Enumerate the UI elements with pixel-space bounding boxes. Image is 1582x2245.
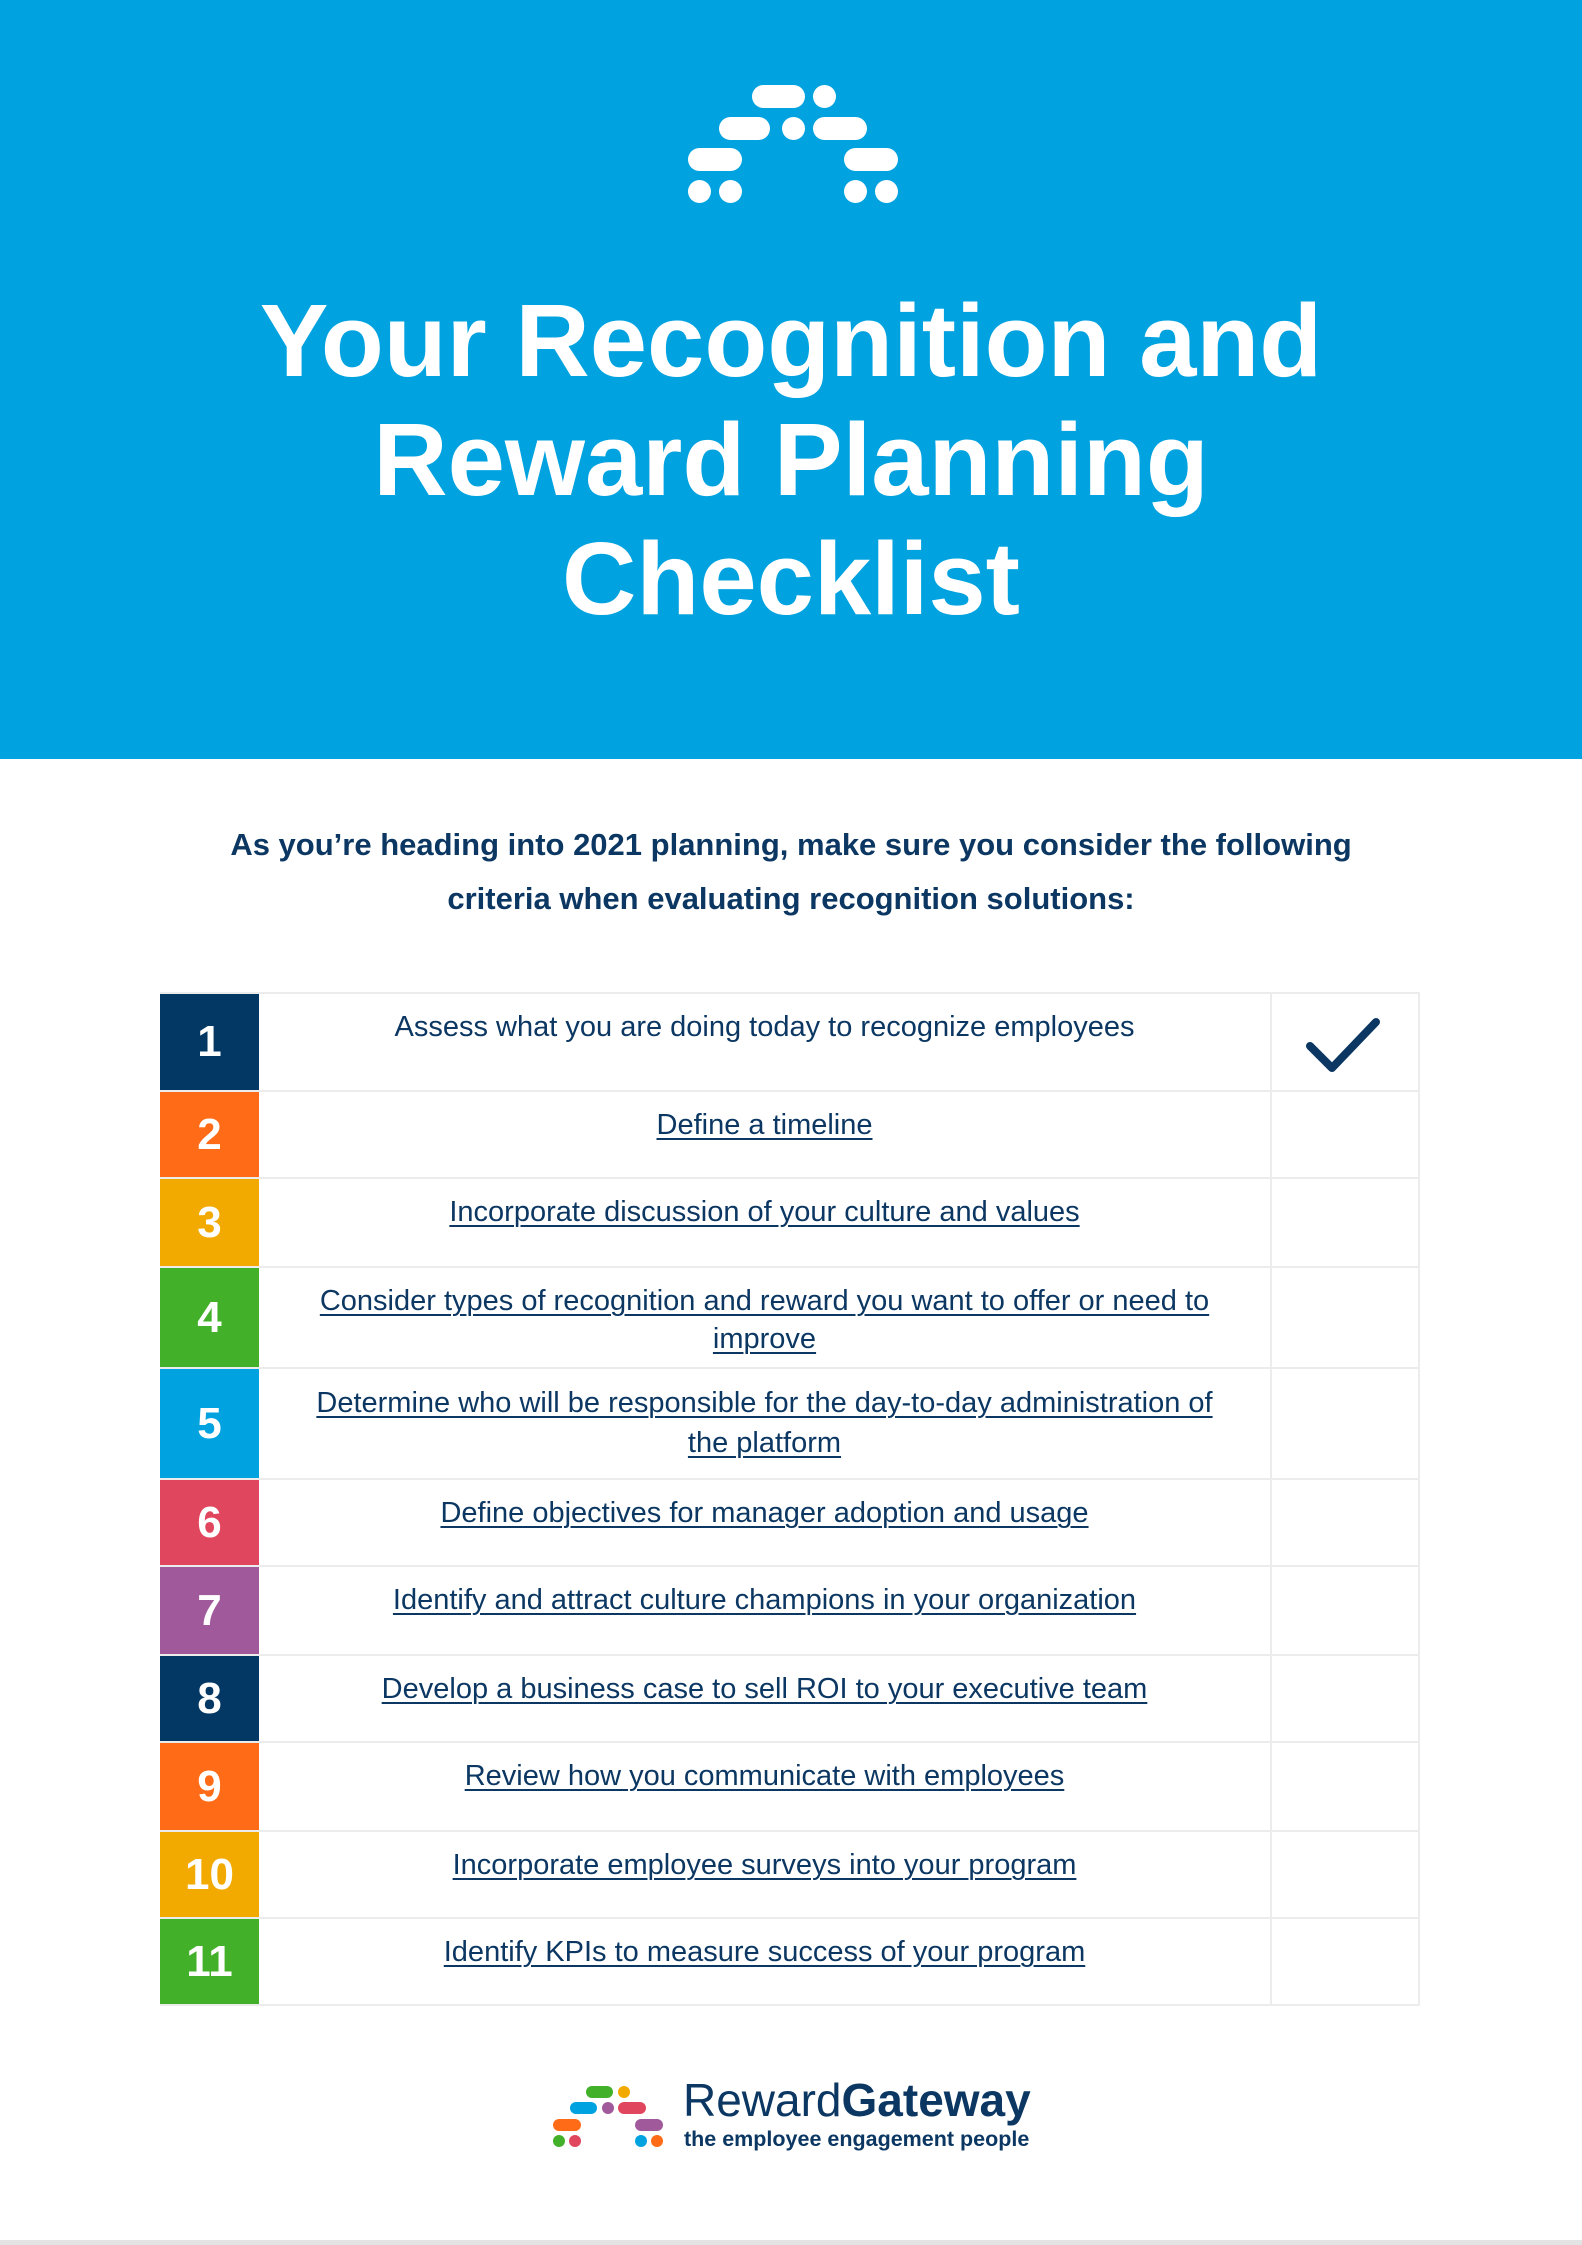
tagline: the employee engagement people — [684, 2127, 1029, 2151]
row 5: 5 — [197, 1398, 222, 1448]
row 11: Identify KPIs to measure success of your program — [444, 1936, 1085, 1968]
wordmark: RewardGateway — [683, 2074, 1031, 2126]
row 4 — [160, 1266, 1420, 1367]
title — [260, 283, 1322, 636]
row 2 — [160, 1090, 1420, 1177]
icon: logo — [688, 85, 898, 203]
row 9: Review how you communicate with employees — [465, 1760, 1064, 1792]
row 10 — [160, 1830, 1420, 1917]
row 5: the platform — [688, 1427, 841, 1459]
row 6: Define objectives for manager adoption and usage — [440, 1497, 1089, 1529]
intro text: criteria when evaluating recognition solutions: — [447, 881, 1135, 916]
row 11 — [160, 1917, 1420, 2006]
row 9: 9 — [197, 1762, 222, 1810]
title: Reward Planning — [373, 402, 1209, 517]
header banner — [0, 0, 1582, 759]
row 6: 6 — [197, 1498, 222, 1546]
row 3 — [160, 1177, 1420, 1266]
row 7: Identify and attract culture champions in your organization — [393, 1584, 1136, 1616]
row 7 — [160, 1565, 1420, 1654]
row 10: 10 — [185, 1850, 234, 1898]
row 11: 11 — [186, 1936, 233, 1986]
title: Your Recognition and — [260, 283, 1322, 398]
row 4: improve — [713, 1323, 816, 1355]
row 5 — [160, 1367, 1420, 1478]
row 2: 2 — [197, 1110, 222, 1158]
row 3: 3 — [197, 1198, 222, 1246]
row 4: 4 — [197, 1292, 222, 1342]
intro text — [230, 827, 1352, 916]
row 1: Assess what you are doing today to recognize employees — [395, 1011, 1134, 1043]
row 3: Incorporate discussion of your culture and values — [449, 1196, 1080, 1228]
row 5: Determine who will be responsible for the day-to-day administration of — [316, 1387, 1213, 1419]
row 10: Incorporate employee surveys into your program — [453, 1849, 1076, 1881]
row 9 — [160, 1741, 1420, 1830]
title: Checklist — [562, 521, 1020, 636]
row 1 — [160, 992, 1420, 1090]
row 1: 1 — [197, 1017, 222, 1066]
row 8 — [160, 1654, 1420, 1741]
row 2: Define a timeline — [656, 1109, 872, 1141]
row 8: Develop a business case to sell ROI to your executive team — [382, 1673, 1147, 1705]
row 7: 7 — [197, 1586, 222, 1634]
row 8: 8 — [197, 1674, 222, 1722]
row 6 — [160, 1478, 1420, 1565]
row 4: Consider types of recognition and reward you want to offer or need to — [320, 1285, 1209, 1317]
icon: colored logo — [553, 2086, 663, 2147]
footer logo — [553, 2074, 1031, 2151]
checklist table — [160, 992, 1420, 2006]
intro text: As you’re heading into 2021 planning, make sure you consider the following — [230, 827, 1352, 862]
